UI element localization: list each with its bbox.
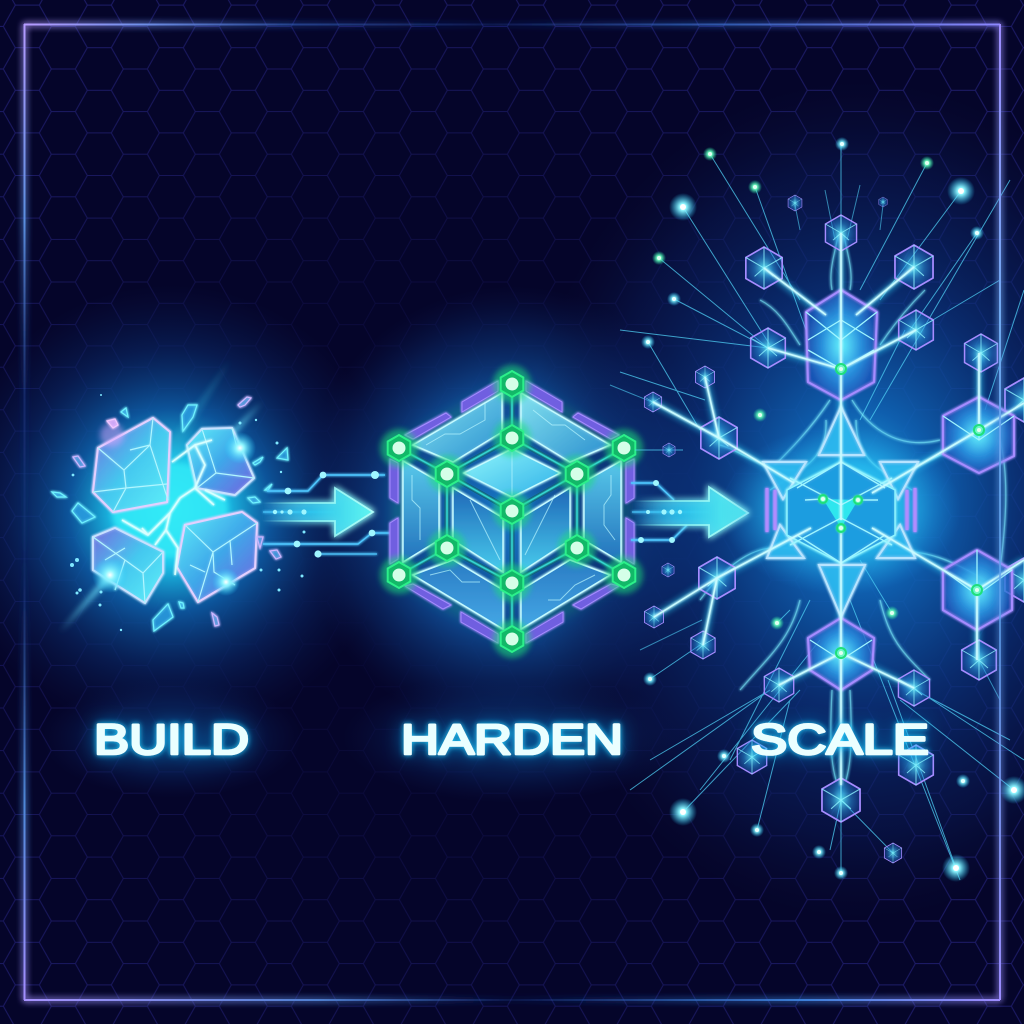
sparks bbox=[224, 432, 256, 464]
wispy filaments bbox=[700, 235, 1006, 780]
arrow shape bbox=[632, 487, 748, 537]
lightning cracks bbox=[122, 440, 225, 575]
icon: branching crystal network (Scale) bbox=[610, 137, 1024, 882]
green nodes bbox=[380, 365, 643, 658]
glass panels bbox=[403, 393, 621, 629]
icon: reinforced cube (Harden) bbox=[380, 365, 643, 658]
green junction nodes bbox=[816, 362, 986, 660]
icon: shattered crystal (Build) bbox=[52, 360, 306, 632]
purple armour tabs bbox=[390, 381, 498, 643]
crystal: bottom-right bbox=[177, 512, 257, 602]
large crystal hubs bbox=[806, 290, 1014, 690]
crystal: bottom-left bbox=[93, 528, 163, 603]
glowing end points bbox=[641, 137, 1024, 882]
label: SCALE: SCALE bbox=[751, 716, 929, 764]
circuit traces bbox=[631, 483, 709, 540]
circuit traces bbox=[263, 475, 392, 554]
main branch glow bbox=[653, 233, 1024, 800]
label: HARDEN: HARDEN bbox=[401, 716, 623, 764]
central burst glow bbox=[721, 425, 961, 595]
arrow: build to harden bbox=[262, 471, 392, 558]
thin radiating lines bbox=[610, 144, 1024, 880]
crystal: top-left bbox=[93, 418, 170, 512]
circuit etching bbox=[412, 402, 615, 600]
crystal: top-right bbox=[187, 428, 254, 495]
arrow: harden to scale bbox=[631, 480, 748, 543]
strut frame bbox=[399, 384, 624, 639]
starburst flare bbox=[60, 360, 262, 632]
arrow shape bbox=[262, 488, 373, 536]
central hub bbox=[767, 462, 915, 563]
crystal fragments bbox=[52, 397, 288, 631]
label: BUILD: BUILD bbox=[94, 716, 249, 764]
green frame glow bbox=[399, 384, 624, 639]
funnels and triangles bbox=[763, 407, 918, 617]
bright branches bbox=[653, 233, 1024, 785]
crystal nodes bbox=[644, 195, 1024, 863]
